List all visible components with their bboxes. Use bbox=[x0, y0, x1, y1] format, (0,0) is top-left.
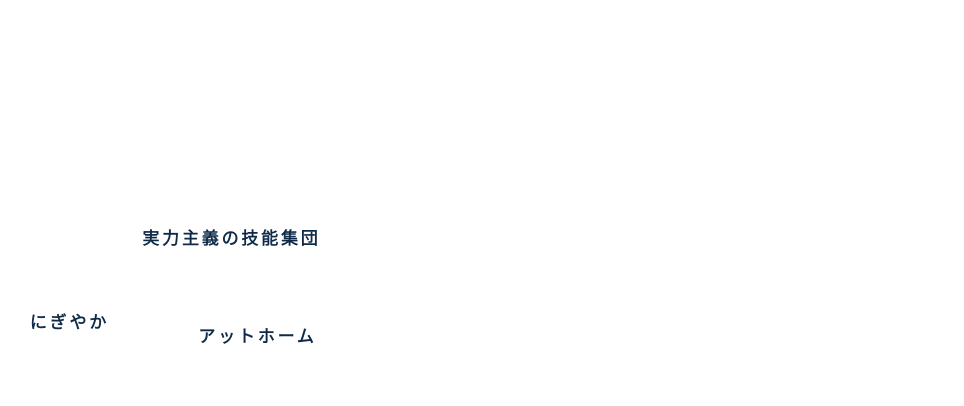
label: にぎやか: にぎやか bbox=[30, 313, 109, 332]
label: 実力主義の技能集団: 実力主義の技能集団 bbox=[142, 229, 321, 248]
label: アットホーム: アットホーム bbox=[198, 327, 317, 346]
